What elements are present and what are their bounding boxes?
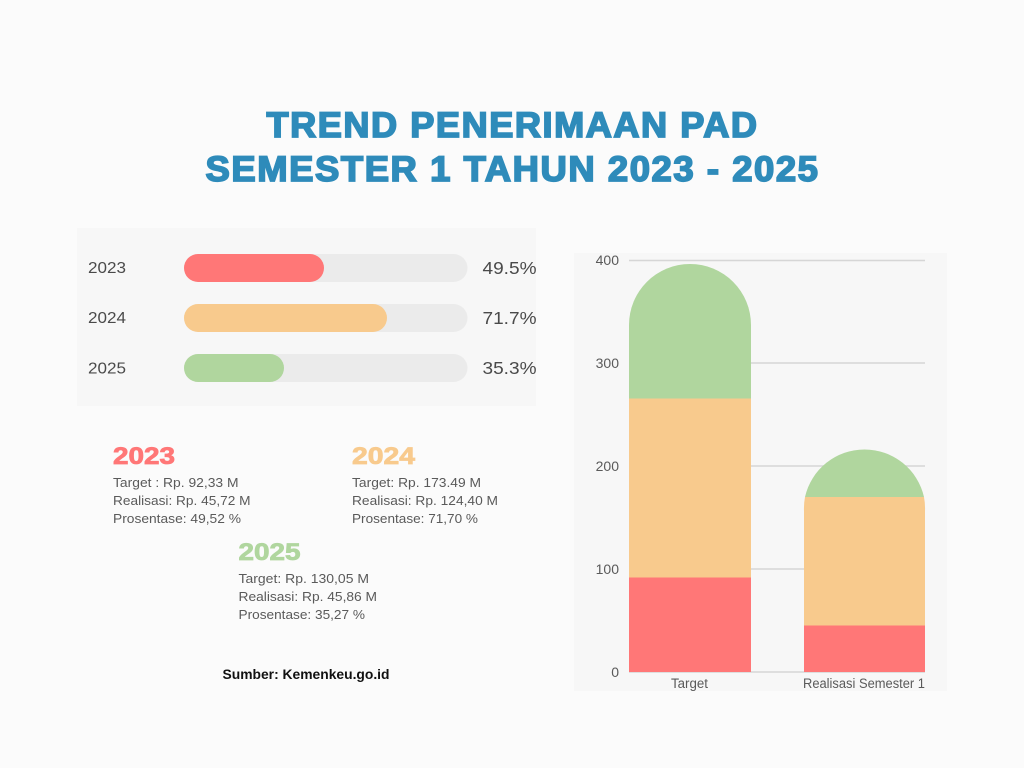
text block: 2024: Prosentase: 71,70 % <box>352 511 478 526</box>
progress row 2025: 2025 <box>88 360 126 378</box>
progress row 2023: 2023 <box>88 260 126 277</box>
text block: 2023: Target : Rp. 92,33 M <box>113 475 238 490</box>
progress row 2024: 2024 <box>88 310 126 327</box>
title: SEMESTER 1 TAHUN 2023 - 2025 <box>206 149 820 189</box>
text block: 2025: Prosentase: 35,27 % <box>238 607 365 622</box>
y axis labels <box>596 252 619 680</box>
progress row 2023: 49.5% <box>482 258 536 278</box>
text block: 2025: Target: Rp. 130,05 M <box>238 571 369 586</box>
text block: 2025 <box>238 539 377 622</box>
progress row 2025: 35.3% <box>482 358 536 378</box>
progress row 2025 <box>88 354 536 382</box>
bar: Realisasi Semester 1 <box>804 449 925 672</box>
x axis labels: Target <box>671 676 708 691</box>
y axis labels: 200 <box>596 458 619 474</box>
text block: 2025: Realisasi: Rp. 45,86 M <box>238 589 377 604</box>
text block: 2023: Realisasi: Rp. 45,72 M <box>113 493 250 508</box>
y axis labels: 400 <box>596 252 619 268</box>
y axis labels: 100 <box>596 561 619 577</box>
panel: progress bars <box>77 228 536 406</box>
progress row 2023 <box>88 254 536 282</box>
y axis labels: 300 <box>596 355 619 371</box>
x axis labels <box>671 676 925 691</box>
bar: Target <box>629 264 751 672</box>
text block: 2023: 2023 <box>113 443 175 470</box>
text block: 2024: Realisasi: Rp. 124,40 M <box>352 493 498 508</box>
progress row 2024 <box>88 304 536 332</box>
panel: stacked bar chart <box>574 252 947 691</box>
text block: 2023: Prosentase: 49,52 % <box>113 511 241 526</box>
text block: 2023 <box>113 443 250 526</box>
text block: 2024: Target: Rp. 173.49 M <box>352 475 481 490</box>
title <box>206 105 820 189</box>
progress row 2024: 71.7% <box>482 308 536 328</box>
x axis labels: Realisasi Semester 1 <box>803 676 925 691</box>
source note: Sumber: Kemenkeu.go.id <box>222 666 390 682</box>
y axis labels: 0 <box>611 664 619 680</box>
text block: 2024 <box>352 443 498 526</box>
text block: 2025: 2025 <box>238 539 300 566</box>
title: TREND PENERIMAAN PAD <box>266 105 758 145</box>
text block: 2024: 2024 <box>352 443 416 470</box>
